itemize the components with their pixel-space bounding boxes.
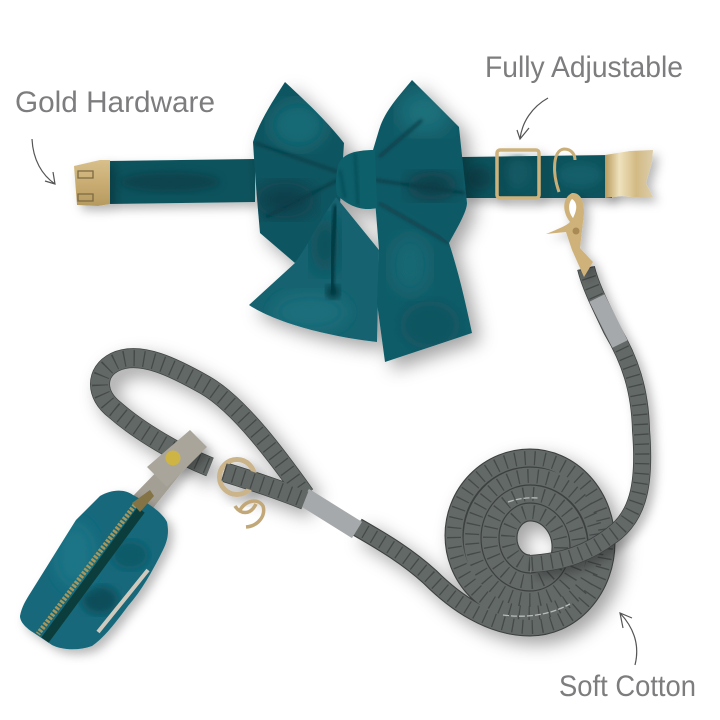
rope through ring bbox=[224, 472, 305, 500]
arrow: to cotton rope bbox=[620, 613, 637, 665]
bow bbox=[249, 80, 472, 362]
heading: Fully Adjustable label: Fully Adjustable bbox=[485, 51, 683, 84]
swivel clasp bbox=[546, 193, 593, 277]
adjuster slide bbox=[497, 150, 539, 198]
velvet strap shading bbox=[120, 157, 602, 192]
leash rope bbox=[100, 268, 642, 627]
rope coil bbox=[357, 458, 606, 627]
poop bag pouch bbox=[20, 430, 207, 649]
collar bbox=[74, 149, 653, 206]
swirl charm bbox=[235, 501, 264, 527]
snap button bbox=[166, 450, 180, 466]
leather tab bbox=[132, 430, 207, 512]
knot fold line bbox=[340, 153, 358, 205]
heading: Soft Cotton label: Soft Cotton bbox=[559, 670, 696, 703]
rope from clasp crossing coil bbox=[530, 268, 642, 564]
arrow: to adjuster slide bbox=[517, 98, 548, 139]
gold O-ring and charm bbox=[220, 460, 305, 527]
pouch body bbox=[20, 491, 168, 649]
zipper bbox=[38, 505, 141, 640]
silver whipping near handle bbox=[304, 497, 357, 530]
silver whipping near clasp bbox=[597, 298, 620, 344]
bow upper right wing bbox=[373, 80, 467, 243]
zipper pull bbox=[132, 490, 154, 512]
collar strap right bbox=[462, 155, 612, 198]
heading: Gold Hardware label: Gold Hardware bbox=[15, 86, 215, 119]
bow upper left wing bbox=[253, 82, 344, 263]
D-ring bbox=[555, 149, 575, 192]
rope loop handle bbox=[100, 358, 305, 500]
left gold buckle bbox=[74, 160, 110, 206]
collar strap left bbox=[108, 159, 255, 204]
bow centre knot bbox=[336, 150, 377, 209]
arrow: to gold buckle bbox=[32, 139, 55, 184]
cream label bbox=[98, 570, 148, 632]
O-ring bbox=[220, 460, 254, 494]
silver thread specks in coil bbox=[503, 498, 570, 616]
bow left tail bbox=[249, 197, 379, 342]
bow right tail bbox=[375, 200, 472, 362]
right gold clip bbox=[605, 150, 653, 198]
